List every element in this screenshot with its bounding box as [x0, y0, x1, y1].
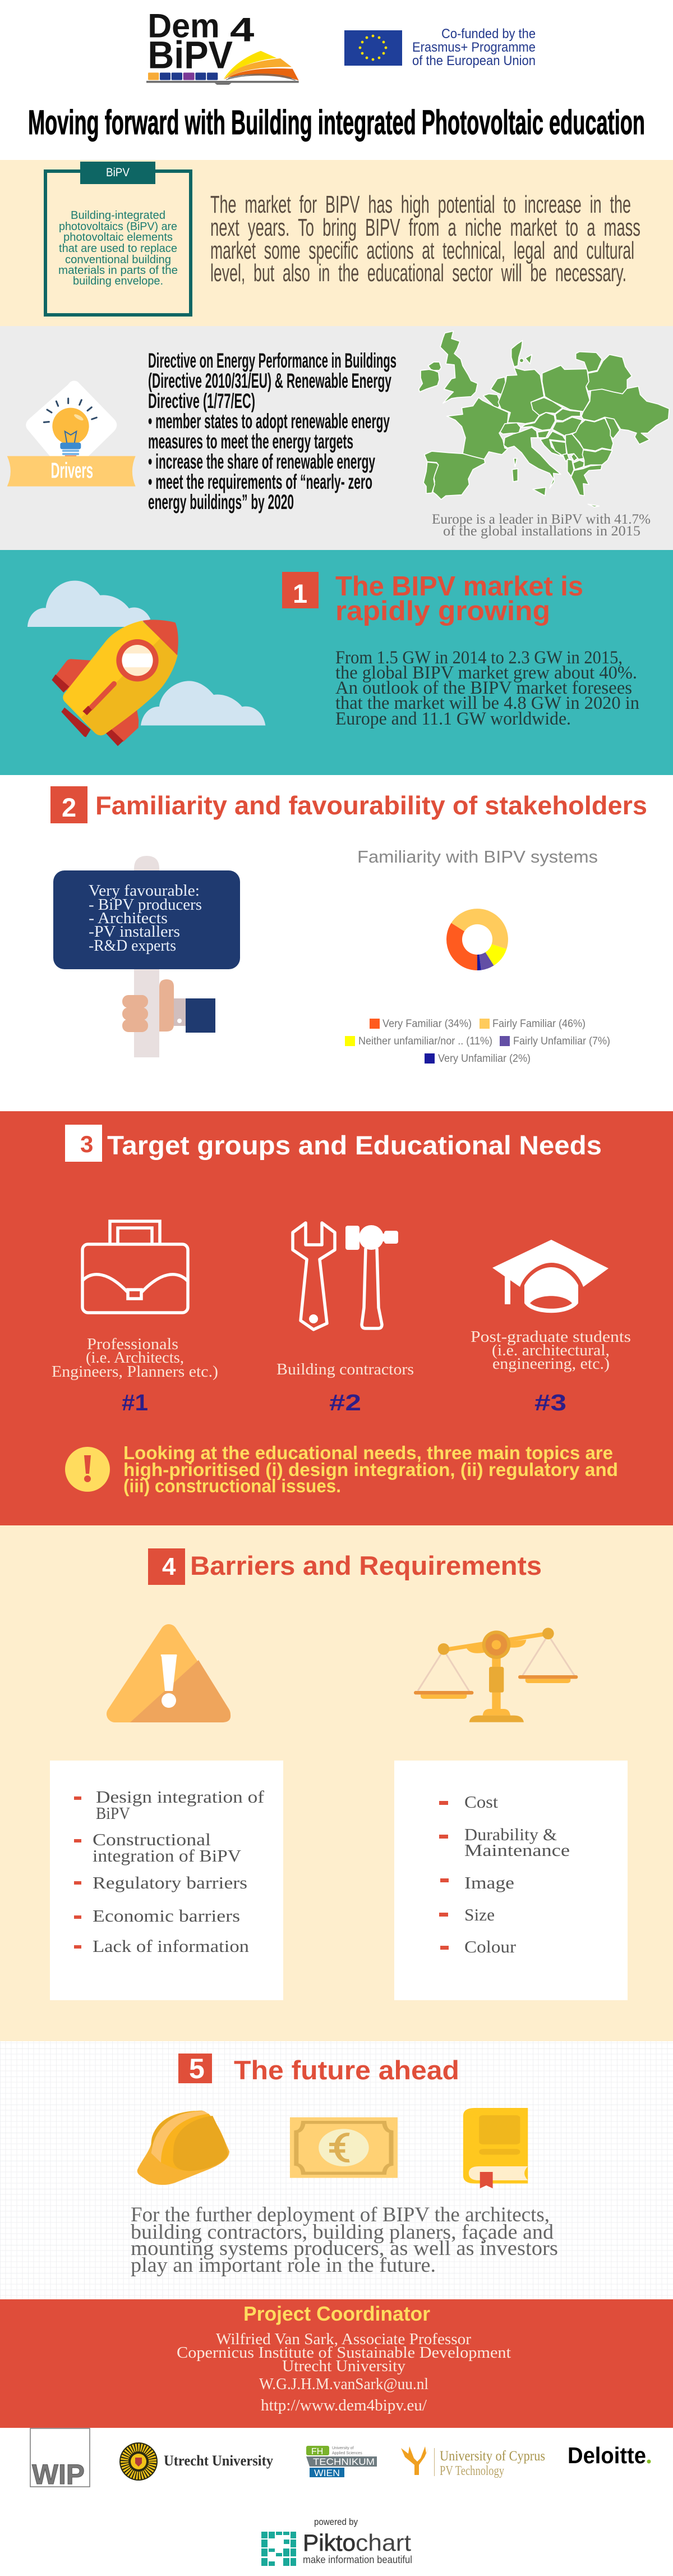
icon: wrench and hammer: [293, 1223, 398, 1330]
logo: powered by Piktochart: chart: [356, 2529, 411, 2556]
text block: future deployment: mounting systems producers, as well as investors: [131, 2237, 558, 2260]
panel: requirements list: Cost: [464, 1792, 498, 1812]
logo: Deloitte: Deloitte: [568, 2442, 646, 2468]
logo: FH Technikum Wien: [306, 2446, 377, 2478]
text block: map caption: Europe is a leader in BiPV with 41.7%: [432, 512, 651, 527]
logo: EU Erasmus+ co-funding: of the European Union: [412, 53, 536, 68]
text block: professionals: Engineers, Planners etc.): [52, 1363, 218, 1381]
logo: Dem4BiPV: 4: [230, 11, 255, 48]
text block: directive: Directive on Energy Performance in Buildings: [148, 349, 397, 372]
panel: 3 target groups: [0, 1111, 673, 1525]
chart legend: Very Familiar (34%): [382, 1018, 472, 1030]
logo: University of Cyprus: [401, 2446, 545, 2478]
callout: BiPV definition box: [45, 162, 191, 315]
panel: project coordinator: [0, 2299, 673, 2428]
panel: barriers list: [50, 1761, 283, 2000]
logo: University of Cyprus: PV Technology: [440, 2464, 504, 2478]
icon: graduation cap: [492, 1240, 609, 1313]
text block: very favourable: - Architects: [89, 909, 168, 927]
chart legend: Very Unfamiliar (2%): [438, 1053, 531, 1065]
logo: EU Erasmus+ co-funding: Erasmus+ Programme: [412, 40, 536, 55]
text block: very favourable: -R&D experts: [89, 937, 176, 955]
icon: exclamation circle: [65, 1447, 110, 1492]
panel: drivers: [0, 326, 673, 550]
logo: powered by Piktochart: powered by: [314, 2517, 358, 2527]
panel: requirements list: Maintenance: [464, 1840, 570, 1860]
text block: contact details: Utrecht University: [282, 2358, 405, 2375]
text block: post-graduate students: engineering, etc.): [492, 1355, 610, 1373]
heading: market: [335, 571, 583, 626]
callout: BiPV definition box: that are used to replace: [59, 242, 177, 255]
text block: future deployment: [131, 2203, 558, 2277]
icon: balance scales: [414, 1628, 578, 1722]
panel: barriers list: Design integration of: [96, 1787, 265, 1807]
icon: book: [463, 2108, 528, 2188]
logo: WIP: WIP: [32, 2459, 85, 2490]
icon: rocket and clouds: [27, 581, 265, 746]
rank numbers: [122, 1390, 566, 1415]
badge: number 3: [65, 1125, 102, 1162]
icon: hard hat: [137, 2111, 229, 2185]
text block: directive: • member states to adopt renewable energy: [148, 410, 390, 433]
text block: contact details: Wilfried Van Sark, Associate Professor: [216, 2331, 472, 2348]
badge: number 4: [148, 1548, 185, 1585]
chart legend: [345, 1018, 610, 1065]
logo: EU Erasmus+ co-funding: [344, 26, 536, 68]
icon: briefcase: [82, 1221, 188, 1313]
panel: requirements list: Durability &: [464, 1825, 557, 1844]
panel: requirements list: Size: [464, 1905, 495, 1924]
heading: market: The BIPV market is: [335, 571, 583, 602]
text block: directive: energy buildings” by 2020: [148, 491, 294, 514]
chart: familiarity donut: [345, 847, 610, 1065]
panel: barriers list: Lack of information: [93, 1936, 250, 1956]
icon: drivers light bulb and banner: [7, 381, 136, 487]
text block: professionals: [52, 1336, 218, 1381]
panel: requirements list: Colour: [464, 1937, 517, 1956]
logo: FH Technikum Wien: TECHNIKUM: [313, 2456, 375, 2467]
text block: professionals: (i.e. Architects,: [86, 1349, 184, 1367]
logo: Dem4BiPV: [146, 7, 299, 85]
text block: directive: [148, 349, 397, 514]
callout: educational needs: Looking at the educational needs, three main topics are: [123, 1442, 613, 1463]
icon: drivers light bulb and banner: Drivers: [51, 459, 93, 483]
badge: number 2: 2: [62, 792, 76, 822]
logo: FH Technikum Wien: Applied Sciences: [332, 2451, 362, 2455]
logo: powered by Piktochart: [261, 2517, 412, 2566]
heading: target groups: Target groups and Educational Needs: [107, 1130, 602, 1160]
text block: market figures: Europe and 11.1 GW worldwide.: [335, 709, 571, 729]
text block: market figures: that the market will be 4.8 GW in 2020 in: [335, 693, 639, 713]
rank numbers: #1: [122, 1390, 148, 1415]
logo: powered by Piktochart: make information beautiful: [303, 2554, 412, 2565]
callout: BiPV definition box: BiPV: [106, 166, 130, 179]
icon: warning triangle: [115, 1633, 231, 1722]
panel: barriers list: Constructional: [93, 1830, 211, 1849]
chart legend: Fairly Unfamiliar (7%): [513, 1035, 610, 1047]
text block: market figures: From 1.5 GW in 2014 to 2.3 GW in 2015,: [335, 648, 623, 668]
badge: number 1: [282, 572, 319, 608]
panel: 4 barriers and requirements: [0, 1525, 673, 2041]
text block: contact details: http://www.dem4bipv.eu/: [261, 2397, 427, 2414]
logo: EU Erasmus+ co-funding: Co-funded by the: [441, 26, 536, 42]
logo: FH Technikum Wien: FH: [311, 2447, 323, 2456]
panel: requirements list: Image: [464, 1873, 514, 1892]
panel: barriers list: Economic barriers: [93, 1906, 240, 1926]
rank numbers: #3: [534, 1390, 566, 1415]
text block: market figures: An outlook of the BIPV market foresees: [335, 678, 632, 698]
text block: future deployment: building contractors, building planers, façade and: [131, 2221, 554, 2244]
badge: number 4: 4: [162, 1553, 176, 1580]
panel: barriers list: Regulatory barriers: [93, 1873, 247, 1892]
text block: market figures: the global BIPV market grew about 40%.: [335, 663, 637, 683]
text block: contact details: W.G.J.H.M.vanSark@uu.nl: [259, 2376, 428, 2393]
logo: Dem4BiPV: Dem: [147, 7, 220, 45]
callout: BiPV definition box: photovoltaics (BiPV) are: [59, 221, 177, 233]
logo: FH Technikum Wien: University of: [332, 2446, 354, 2450]
icon: euro banknote: [290, 2117, 398, 2178]
panel: barriers list: integration of BiPV: [93, 1846, 242, 1865]
badge: number 3: 3: [80, 1131, 93, 1157]
logo: Dem4BiPV: BiPV: [147, 34, 233, 77]
panel: requirements list: [394, 1761, 628, 2000]
text block: directive: Directive (1/77/EC): [148, 389, 255, 412]
chart legend: Neither unfamiliar/nor .. (11%): [358, 1035, 492, 1047]
callout: BiPV definition box: conventional building: [65, 254, 171, 266]
badge: number 2: [50, 786, 87, 823]
callout: BiPV definition box: Building-integrated: [71, 209, 165, 222]
text block: directive: measures to meet the energy targets: [148, 430, 353, 453]
text block: directive: (Directive 2010/31/EU) & Renewable Energy: [148, 369, 391, 392]
text block: very favourable: [89, 882, 202, 955]
text block: directive: • meet the requirements of “nearly- zero: [148, 470, 372, 493]
badge: number 5: [178, 2053, 212, 2084]
panel: 5 the future ahead: [0, 2041, 673, 2299]
text block: post-graduate students: [471, 1328, 631, 1373]
text block: market potential: [210, 191, 640, 287]
logo: FH Technikum Wien: WIEN: [314, 2468, 340, 2478]
text block: contact details: Copernicus Institute of Sustainable Development: [177, 2344, 511, 2362]
text block: professionals: Professionals: [87, 1336, 178, 1353]
logo: Utrecht University: [119, 2442, 273, 2481]
text block: post-graduate students: (i.e. architectural,: [492, 1342, 610, 1359]
heading: project coordinator: Project Coordinator: [243, 2302, 430, 2325]
panel: 1 market growth: [0, 550, 673, 775]
panel: 2 familiarity and favourability: [0, 775, 673, 1111]
heading: barriers: Barriers and Requirements: [190, 1551, 542, 1580]
heading: market: rapidly growing: [335, 596, 550, 626]
text block: contact details: [177, 2331, 511, 2414]
text block: directive: • increase the share of renewable energy: [148, 450, 375, 473]
rank numbers: #2: [329, 1390, 361, 1415]
logo: WIP: [30, 2428, 90, 2490]
text block: market figures: [335, 648, 639, 729]
logo: powered by Piktochart: Pikto: [303, 2529, 356, 2556]
logo: Utrecht University: Utrecht University: [164, 2453, 273, 2469]
heading: familiarity: Familiarity and favourability of stakeholders: [95, 791, 647, 820]
text block: building contractors: Building contractors: [276, 1361, 414, 1378]
panel: BiPV introduction: [0, 160, 673, 326]
badge: number 5: 5: [189, 2053, 205, 2084]
panel: barriers list: BiPV: [96, 1803, 131, 1823]
callout: BiPV definition box: building envelope.: [73, 275, 163, 287]
callout: BiPV definition box: materials in parts of the: [58, 264, 178, 277]
badge: number 1: 1: [293, 579, 307, 608]
logo: University of Cyprus: University of Cyprus: [440, 2449, 545, 2464]
chart legend: Fairly Familiar (46%): [492, 1018, 586, 1030]
text block: map caption: of the global installations in 2015: [443, 524, 640, 539]
text block: future deployment: For the further deployment of BIPV the architects,: [131, 2203, 550, 2226]
chart: familiarity donut: Familiarity with BIPV systems: [357, 847, 598, 867]
heading: future: The future ahead: [234, 2055, 459, 2085]
text block: map caption: [432, 512, 651, 539]
map: Europe: [419, 331, 669, 507]
text block: very favourable: -PV installers: [89, 923, 180, 941]
callout: educational needs: [123, 1442, 618, 1496]
text block: post-graduate students: Post-graduate students: [471, 1328, 631, 1346]
icon: hand holding sign: [53, 856, 240, 1057]
callout: BiPV definition box: photovoltaic elements: [63, 231, 173, 244]
callout: educational needs: high-prioritised (i) design integration, (ii) regulatory and: [123, 1459, 618, 1480]
text block: very favourable: - BiPV producers: [89, 896, 202, 914]
callout: educational needs: (iii) constructional issues.: [123, 1475, 341, 1496]
text block: very favourable: Very favourable:: [89, 882, 200, 900]
text block: future deployment: play an important role in the future.: [131, 2254, 436, 2277]
